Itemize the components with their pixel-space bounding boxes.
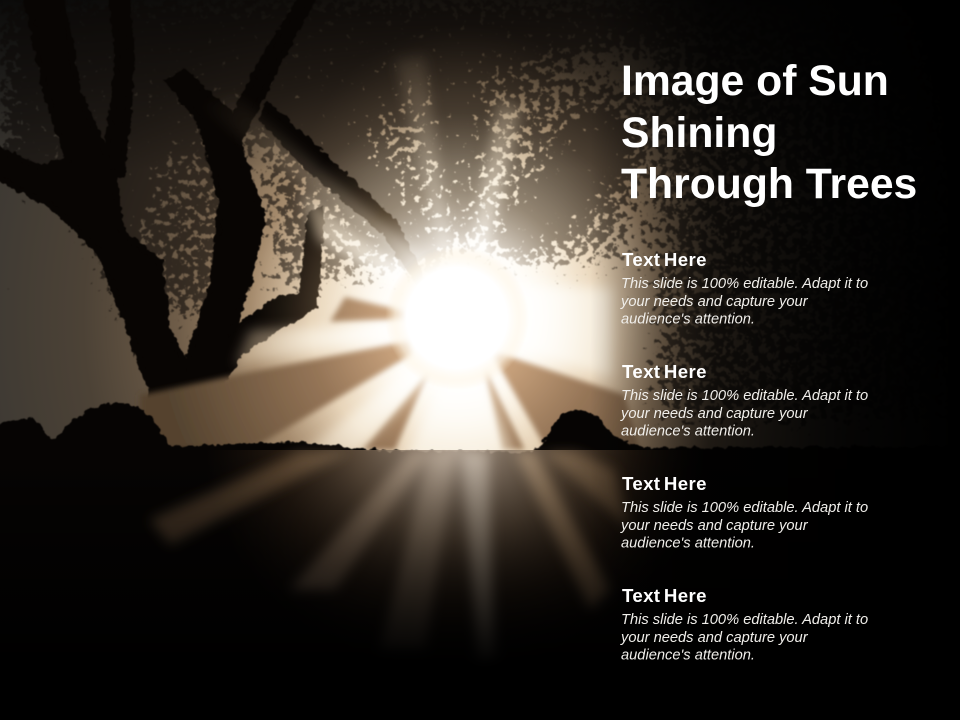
sun: [385, 246, 529, 390]
body 3: This slide is 100% editable. Adapt it to: [621, 500, 868, 516]
upper glow behind leaves: [280, 0, 650, 360]
heading 3: Text Here: [622, 473, 707, 494]
body 2: your needs and capture your: [620, 406, 809, 422]
ground: [0, 403, 960, 720]
body 1: audience's attention.: [621, 312, 755, 328]
body 4: This slide is 100% editable. Adapt it to: [621, 612, 868, 628]
title: Shining: [621, 109, 777, 157]
heading 4: Text Here: [622, 585, 707, 606]
title: Image of Sun: [621, 57, 889, 105]
heading 2: Text Here: [622, 361, 707, 382]
body 1: This slide is 100% editable. Adapt it to: [621, 276, 868, 292]
heading 1: Text Here: [622, 249, 707, 270]
title: Through Trees: [621, 160, 917, 208]
body 1: your needs and capture your: [620, 294, 809, 310]
body 4: audience's attention.: [621, 648, 755, 664]
text block 4: [620, 585, 868, 664]
right side dark fade: [590, 0, 960, 720]
body 2: This slide is 100% editable. Adapt it to: [621, 388, 868, 404]
body 3: your needs and capture your: [620, 518, 809, 534]
text block 2: [620, 361, 868, 440]
foliage canopy: [0, 0, 960, 430]
top canopy shade: [0, 0, 960, 170]
ground fade to black: [0, 450, 960, 670]
text block 3: [620, 473, 868, 552]
sky glow: [0, 0, 960, 470]
ground light beams: [150, 452, 630, 665]
text block 1: [620, 249, 868, 328]
body 2: audience's attention.: [621, 424, 755, 440]
light beams radiating from sun: [200, 55, 612, 460]
body 3: audience's attention.: [621, 536, 755, 552]
tree trunk and limbs: [0, 0, 423, 452]
tan shadow wedges between rays: [140, 297, 640, 452]
sun wash over foliage: [0, 0, 960, 470]
ground glow: [205, 450, 705, 680]
body 4: your needs and capture your: [620, 630, 809, 646]
